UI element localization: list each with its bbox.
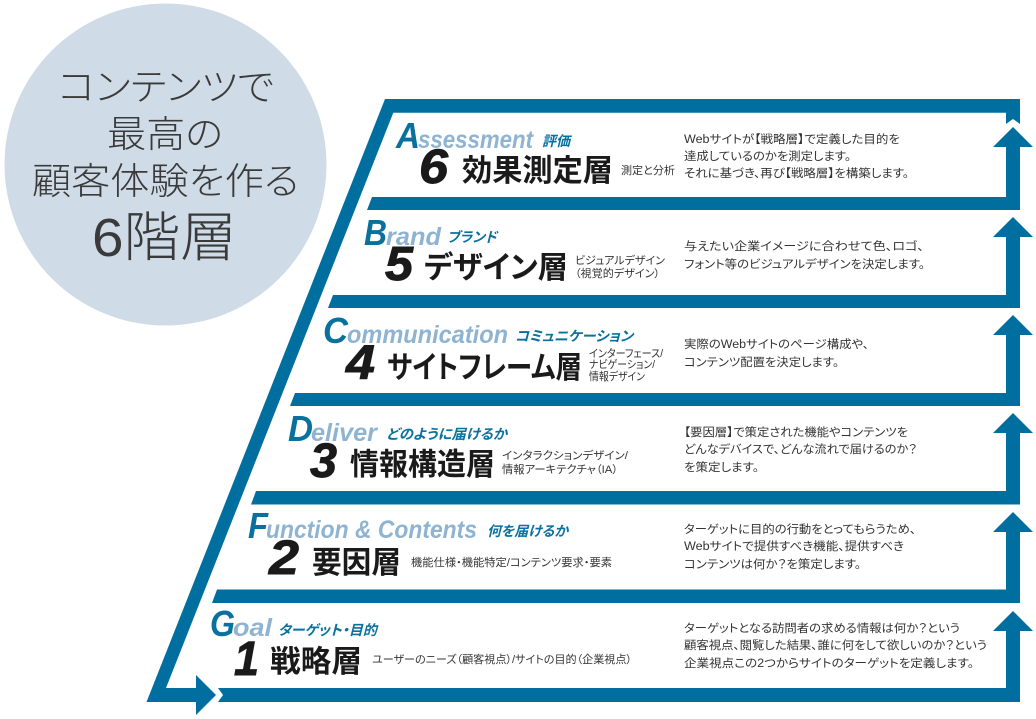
description: それに基づき、再び【戦略層】を構築します。: [684, 166, 909, 180]
description: 与えたい企業イメージに合わせて色、ロゴ、: [684, 239, 924, 253]
heading: Brand: rand: [386, 223, 442, 251]
heading: Goal: ターゲット・目的: [278, 622, 379, 638]
heading: Function & Contents: [248, 505, 569, 546]
title circle: [4, 4, 326, 326]
layer note: インタラクションデザイン/: [502, 448, 628, 462]
description: 顧客視点、閲覧した結果、誰に何をして欲しいのか？という: [684, 638, 987, 652]
heading: Brand: ブランド: [447, 229, 499, 245]
layer name: 6 効果測定層: [419, 141, 613, 194]
description: を策定します。: [684, 460, 759, 474]
layer note: 測定と分析: [621, 163, 675, 177]
arrow: level 5 to level 6: [328, 217, 1033, 308]
arrow: level 1 to level 2: [218, 611, 1033, 702]
layer note: （視覚的デザイン）: [575, 266, 660, 280]
heading: Function & Contents: 何を届けるか: [487, 523, 569, 539]
heading: Communication: コミュニケーション: [515, 328, 635, 344]
description: フォント等のビジュアルデザインを決定します。: [684, 257, 925, 271]
layer note: 情報アーキテクチャ（IA）: [502, 463, 618, 476]
heading: Function & Contents: F: [248, 505, 269, 546]
description: コンテンツ配置を決定します。: [684, 356, 839, 369]
description: 実際のWebサイトのページ構成や、: [684, 338, 869, 351]
title text: コンテンツで: [58, 67, 274, 108]
layer name: 6 効果測定層: 6: [419, 141, 448, 194]
description: Webサイトで提供すべき機能、提供すべき: [684, 539, 904, 553]
layer note: 機能仕様・機能特定/コンテンツ要求・要素: [411, 555, 612, 569]
layer note: ナビゲーション/: [589, 358, 655, 371]
description: Webサイトが【戦略層】で定義した目的を: [684, 132, 900, 146]
title text: 最高の: [107, 114, 223, 155]
heading: Communication: C: [323, 310, 349, 351]
layer note: [589, 347, 663, 383]
layer name: 3 情報構造層: [310, 435, 495, 488]
panel: level 2 function and contents: [248, 505, 916, 585]
layer note: [502, 448, 628, 476]
heading: Assessment: [395, 115, 573, 156]
arrow: level 6 to top: [367, 127, 1033, 210]
title text: [32, 67, 299, 268]
panel: level 5 brand: [364, 212, 925, 291]
heading: Goal: oal: [233, 614, 273, 642]
heading: Function & Contents: unction & Contents: [266, 516, 477, 544]
panel: level 1 goal: [210, 603, 987, 686]
layer name: 1 戦略層: 戦略層: [270, 645, 362, 679]
arrow: level 3 to level 4: [251, 413, 1033, 504]
layer name: 2 要因層: [268, 532, 401, 585]
arrow: level 4 to level 5: [290, 315, 1033, 406]
description: 企業視点この2つからサイトのターゲットを定義します。: [684, 656, 974, 670]
layer note: 情報デザイン: [589, 369, 645, 383]
layer note: ユーザーのニーズ（顧客視点）/サイトの目的（企業視点）: [372, 652, 632, 666]
description: [684, 132, 909, 180]
description: [684, 338, 869, 369]
description: コンテンツは何か？を策定します。: [684, 557, 861, 571]
heading: Goal: G: [210, 603, 235, 644]
description: ターゲットとなる訪問者の求める情報は何か？という: [684, 622, 960, 635]
description: [684, 239, 925, 271]
layer name: 2 要因層: 2: [268, 532, 299, 585]
description: どんなデバイスで、どんな流れで届けるのか？: [684, 442, 917, 456]
layer name: 5 デザイン層: デザイン層: [424, 250, 568, 285]
layer name: 3 情報構造層: 情報構造層: [350, 448, 495, 482]
heading: Communication: [323, 310, 635, 351]
heading: Assessment: ssessment: [418, 126, 534, 154]
arrow frame: top bar and left diagonal with arrow: [146, 99, 1020, 715]
description: ターゲットに目的の行動をとってもらうため、: [684, 522, 916, 536]
layer name: 1 戦略層: 1: [234, 633, 259, 686]
layer name: 4 サイトフレーム層: サイトフレーム層: [387, 351, 582, 385]
layer name: 1 戦略層: [234, 633, 362, 686]
arrow: level 2 to level 3: [212, 512, 1033, 603]
title text: 顧客体験を作る: [32, 161, 299, 202]
layer note: インターフェース/: [589, 347, 663, 360]
layer note: [575, 253, 665, 280]
layer name: 6 効果測定層: 効果測定層: [462, 154, 613, 188]
description: [684, 425, 917, 474]
heading: Deliver: どのように届けるか: [386, 426, 508, 442]
heading: Brand: B: [364, 212, 387, 253]
heading: Deliver: D: [288, 408, 313, 449]
heading: Goal: [210, 603, 379, 644]
heading: Brand: [364, 212, 499, 253]
panel: level 6 assessment: [395, 115, 909, 194]
description: 【要因層】で策定された機能やコンテンツを: [684, 425, 908, 439]
layer name: 5 デザイン層: [385, 238, 568, 291]
description: [684, 522, 916, 571]
heading: Deliver: [288, 408, 508, 449]
description: [684, 622, 987, 670]
layer name: 2 要因層: 要因層: [312, 546, 401, 580]
panel: level 4 communication: [323, 310, 869, 390]
title text: 6階層: [92, 208, 237, 268]
panel: level 3 deliver: [288, 408, 917, 488]
heading: Communication: ommunication: [347, 321, 508, 349]
layer name: 3 情報構造層: 3: [310, 435, 337, 488]
layer note: ビジュアルデザイン: [575, 253, 665, 267]
layer name: 4 サイトフレーム層: [345, 337, 582, 390]
heading: Assessment: 評価: [542, 133, 573, 149]
layer name: 4 サイトフレーム層: 4: [345, 337, 375, 390]
heading: Assessment: A: [395, 115, 420, 156]
description: 達成しているのかを測定します。: [684, 149, 851, 163]
heading: Deliver: eliver: [311, 419, 378, 447]
layer name: 5 デザイン層: 5: [385, 238, 414, 291]
